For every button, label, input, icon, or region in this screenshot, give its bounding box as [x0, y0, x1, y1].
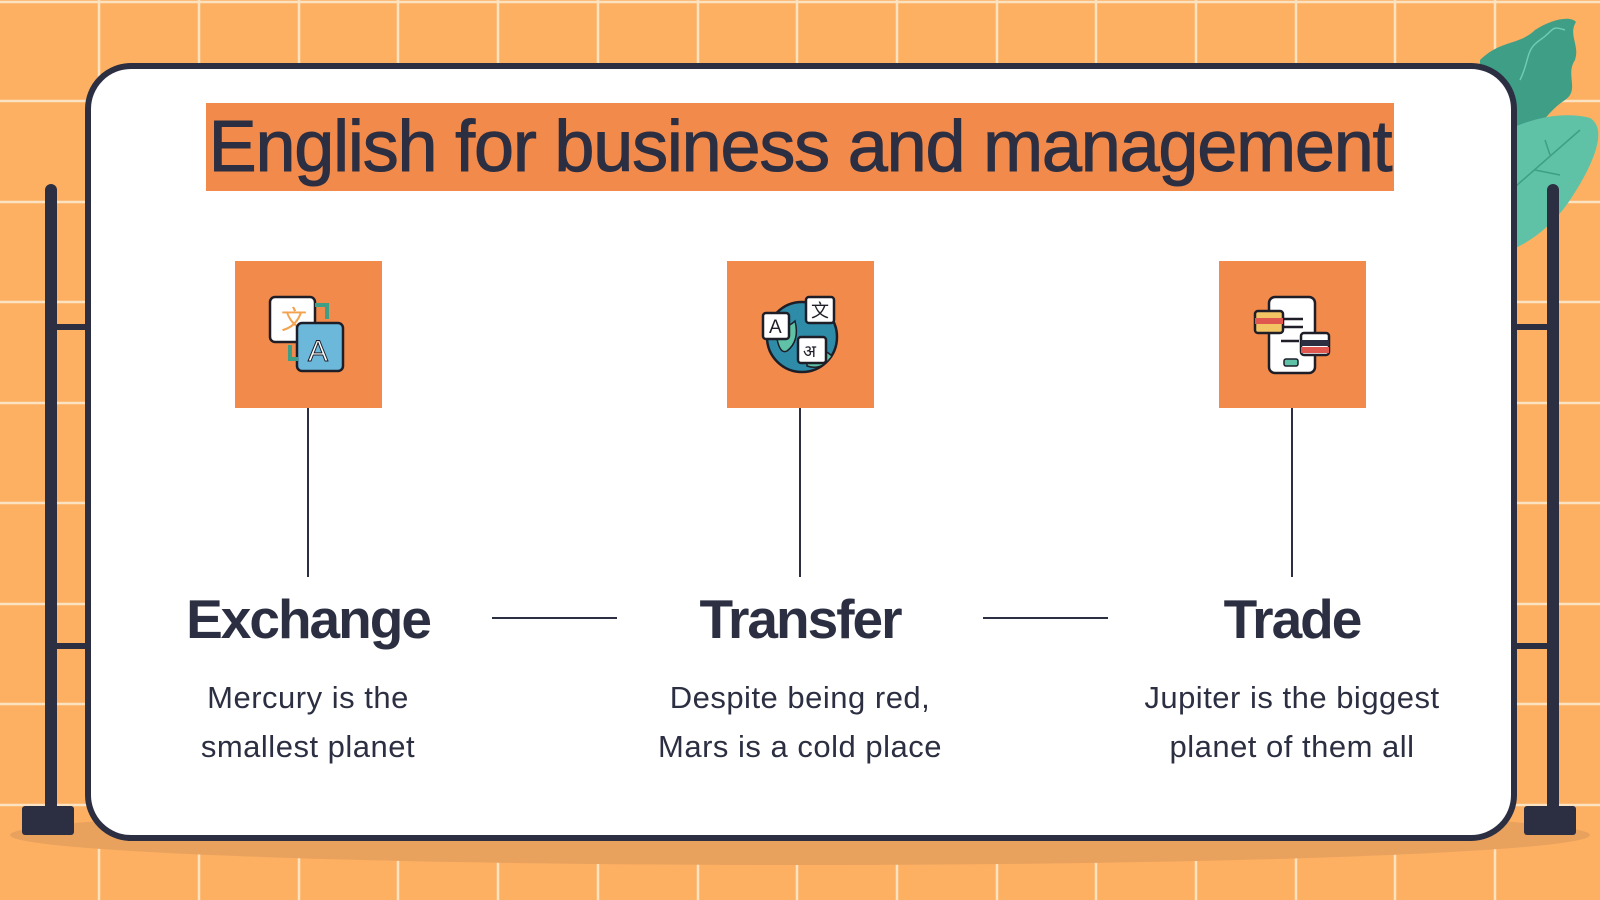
icon: mobile payment	[1219, 261, 1366, 408]
text: exchange: Mercury is the	[207, 680, 409, 715]
icon: globe languages: A	[769, 317, 782, 338]
right post	[1517, 184, 1576, 835]
plant	[1480, 18, 1598, 248]
text: trade: Jupiter is the biggest	[1144, 680, 1440, 715]
icon: globe languages: अ	[803, 342, 817, 362]
card panel	[85, 63, 1517, 841]
heading: Transfer: Transfer	[699, 588, 901, 650]
left post	[22, 184, 85, 835]
text: trade: planet of them all	[1169, 729, 1415, 764]
heading: Exchange: Exchange	[186, 588, 430, 650]
text: transfer: Mars is a cold place	[658, 729, 942, 764]
title: English for business and management	[209, 107, 1391, 187]
shadow under card	[10, 805, 1590, 865]
text: trade	[1144, 680, 1440, 764]
icon: translate: A	[308, 335, 328, 368]
icon: translate	[235, 261, 382, 408]
icon: globe languages	[727, 261, 874, 408]
text: exchange: smallest planet	[201, 729, 415, 764]
icon: translate: 文	[281, 300, 307, 337]
text: transfer	[658, 680, 942, 764]
text: exchange	[201, 680, 415, 764]
heading: Trade: Trade	[1224, 588, 1360, 650]
text: transfer: Despite being red,	[670, 680, 930, 715]
icon: globe languages: 文	[811, 297, 829, 323]
